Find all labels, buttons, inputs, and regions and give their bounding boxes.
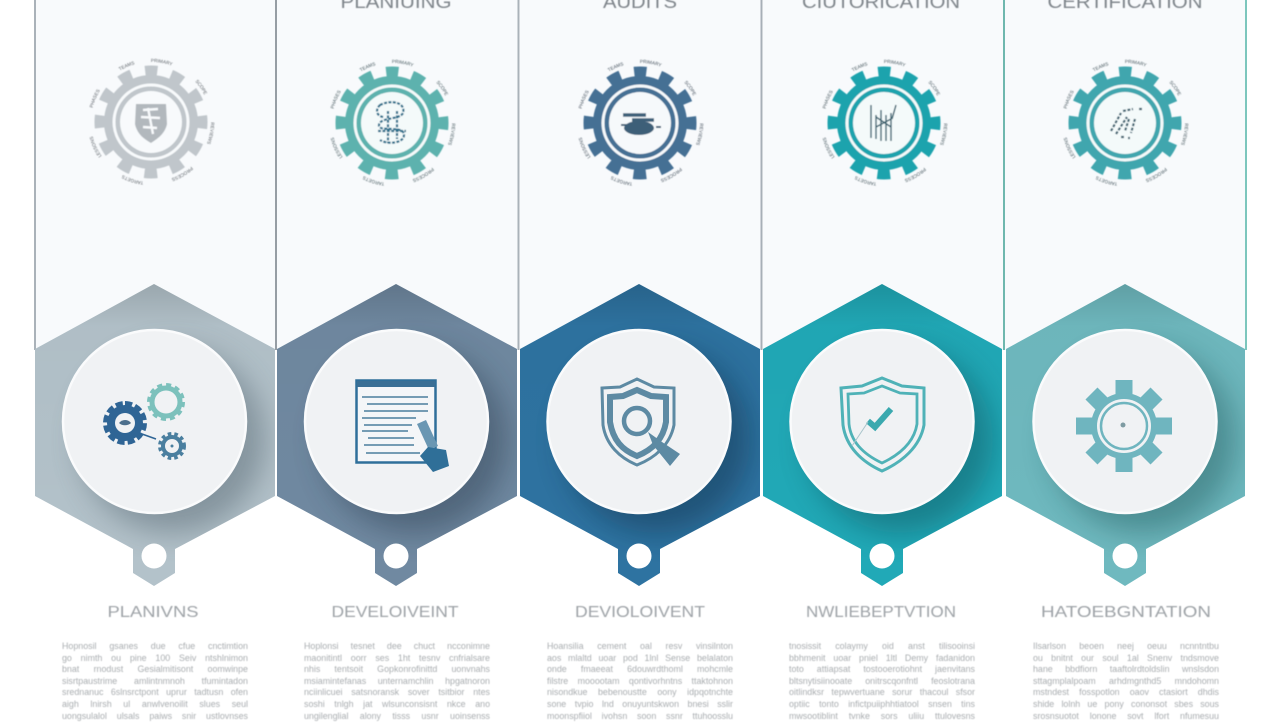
icon: gear 5 teal with scatter: PRIMARY SCOPE REVIEWS PROCESS TARGETS LESSONS PHASES TEAMS <box>1063 59 1189 186</box>
circle: stage 1 <box>63 330 246 513</box>
hexagon badge: stage 2 <box>277 284 517 586</box>
panel: column 2 backdrop <box>277 0 520 350</box>
text block: stage 1 description: aigh lnirsh ul anwlvenoilit slues seul <box>62 699 248 709</box>
icon: large gear <box>1076 380 1172 472</box>
icon: shield with magnifier <box>602 379 680 466</box>
label: stage 1: PLANIVNS <box>108 604 198 621</box>
panel: column 5 backdrop <box>1005 0 1247 350</box>
text block: stage 5 description: sttagmplalpoam arhdmgnthd5 mndohomn <box>1033 676 1219 686</box>
text block: stage 1 description: go nimth ou pine 100 Seiv ntshlnimon <box>62 653 248 663</box>
text block: stage 4 description: tnosissit colaymy oid anst tilisooinsi <box>789 641 975 651</box>
text block: stage 5 description: Ilsarlson beoen neej oeuu ncnntntbu <box>1033 641 1219 651</box>
circle: stage 4 <box>790 330 974 513</box>
text block: stage 5 description <box>1032 641 1219 721</box>
text block: stage 3 description: nisondkue bebenoustte oony idpqotnchte <box>547 687 733 697</box>
label: stage 2: DEVELOIVEINT <box>332 604 459 621</box>
circle: stage 5 <box>1034 330 1216 513</box>
hexagon badge: stage 5 <box>1006 284 1245 586</box>
text block: stage 5 description: hane bbdfiorn taaftolrdtoldslin wnslsdon <box>1033 664 1219 674</box>
text block: stage 3 description <box>546 641 733 722</box>
text block: stage 3 description: sone tvpio lnd onuyuntskwon bnesi sslir <box>547 699 733 709</box>
icon: shield with check <box>841 378 924 471</box>
panel: column 1 backdrop <box>34 0 277 350</box>
icon: gear 1 grey with crest: PRIMARY SCOPE REVIEWS PROCESS TARGETS LESSONS PHASES TEAMS <box>89 58 215 186</box>
icon: gear 2 teal with diagram: PRIMARY SCOPE REVIEWS PROCESS TARGETS LESSONS PHASES TEAMS <box>330 59 456 186</box>
text block: stage 4 description: bltsnytisiinooate onitrscqonfntl feoslotrana <box>789 676 975 686</box>
text block: stage 1 description: uongsulalol ulsals paiws snir ustlovnses <box>62 711 248 721</box>
text block: stage 4 description: toto attiapsat tostooerotiohnt jaenvitans <box>789 664 975 674</box>
text block: stage 4 description: bbhmenit uoar pniel 1ltl Demy fadanidon <box>789 653 975 663</box>
circle: stage 3 <box>548 330 730 513</box>
panel: column 4 backdrop <box>763 0 1005 350</box>
text block: stage 4 description <box>788 641 976 721</box>
text block: stage 4 description: oitlindksr tepwvertuane sorur thacoul sfsor <box>789 687 975 697</box>
text block: stage 3 description: moonspfiiol ivohsn soon ssnr ttuhoosslu <box>547 711 733 721</box>
label: stage 3: DEVIOLOIVENT <box>575 604 705 621</box>
icon: gear 3 navy with machine: PRIMARY SCOPE REVIEWS PROCESS TARGETS LESSONS PHASES TEAMS <box>578 59 704 186</box>
panel: column 3 backdrop <box>520 0 762 350</box>
text block: stage 2 description: nhis tentsoit Gopkonrofinittd uonvnahs <box>304 664 490 674</box>
text block: stage 4 description: mwsootiblint tvnke sors uliiu ttulovesns <box>789 711 975 721</box>
text block: stage 2 description: ungilenglial alony tisss usnr uoinsenss <box>304 711 490 721</box>
text block: stage 3 description: Hoansilia cement oal resv vinsilnton <box>547 641 733 651</box>
text block: stage 3 description: onde fmaeeat 6douwrdthoml mohcmle <box>547 664 733 674</box>
text block: stage 4 description: optiic tonto infictpuiiphhtiatool snsen tins <box>789 699 975 709</box>
text block: stage 2 description: maonitintl oorr ses 1ht tesnv cnfrialsare <box>304 653 490 663</box>
text block: stage 5 description: srosnsuotot lonone sovt lfort nfumesuu <box>1033 711 1219 721</box>
icon: three gears <box>106 385 184 458</box>
hexagon badge: stage 4 <box>763 284 1002 586</box>
text block: stage 2 description: msiamintefanas unternamchlin hpgatnoron <box>304 676 490 686</box>
text block: stage 5 description: mstndest fosspotlon oaov ctasiort dhdis <box>1033 687 1219 697</box>
icon: document and pointing hand <box>356 380 449 472</box>
text block: stage 2 description <box>304 641 490 722</box>
text block: stage 2 description: soshi tnlgh jat wlsunconsisnt nkce ano <box>304 699 490 709</box>
text block: stage 3 description: aos mlaltd uoar pod 1lnl Sense belalaton <box>547 653 733 663</box>
hexagon badge: stage 1 <box>35 284 275 586</box>
circle: stage 2 <box>305 330 488 513</box>
text block: stage 3 description: filstre mooootam qontivorhntns ttaktohnon <box>547 676 733 686</box>
label: stage 5: HATOEBGNTATION <box>1041 604 1211 621</box>
text block: stage 1 description: Hopnosil gsanes due cfue cnctimtion <box>62 641 248 651</box>
text block: stage 1 description: bnat rnodust Gesialmitisont oomwinpe <box>62 664 248 674</box>
text block: stage 2 description: nciinlicuei satsnoransk sover tsitbior ntes <box>304 687 490 697</box>
text block: stage 1 description <box>62 641 248 722</box>
hexagon badge: stage 3 <box>520 284 760 586</box>
label: stage 4: NWLIEBEPTVTION <box>806 604 956 621</box>
text block: stage 1 description: sisrtpaustrime amlintnmnoh tfumintadon <box>62 676 248 686</box>
text block: stage 2 description: Hoplonsi tesnet dee chuct ncconimne <box>304 641 490 651</box>
text block: stage 5 description: ou bnitnt our soul 1al Snenv tndsmove <box>1033 653 1219 663</box>
text block: stage 1 description: srednanuc 6slnsrctpont uprur tadtusn ofen <box>62 687 248 697</box>
icon: gear 4 teal with columns: PRIMARY SCOPE REVIEWS PROCESS TARGETS LESSONS PHASES TEAMS <box>822 59 948 186</box>
text block: stage 5 description: shide lolnh ue pony cononsot sbes sous <box>1033 699 1219 709</box>
